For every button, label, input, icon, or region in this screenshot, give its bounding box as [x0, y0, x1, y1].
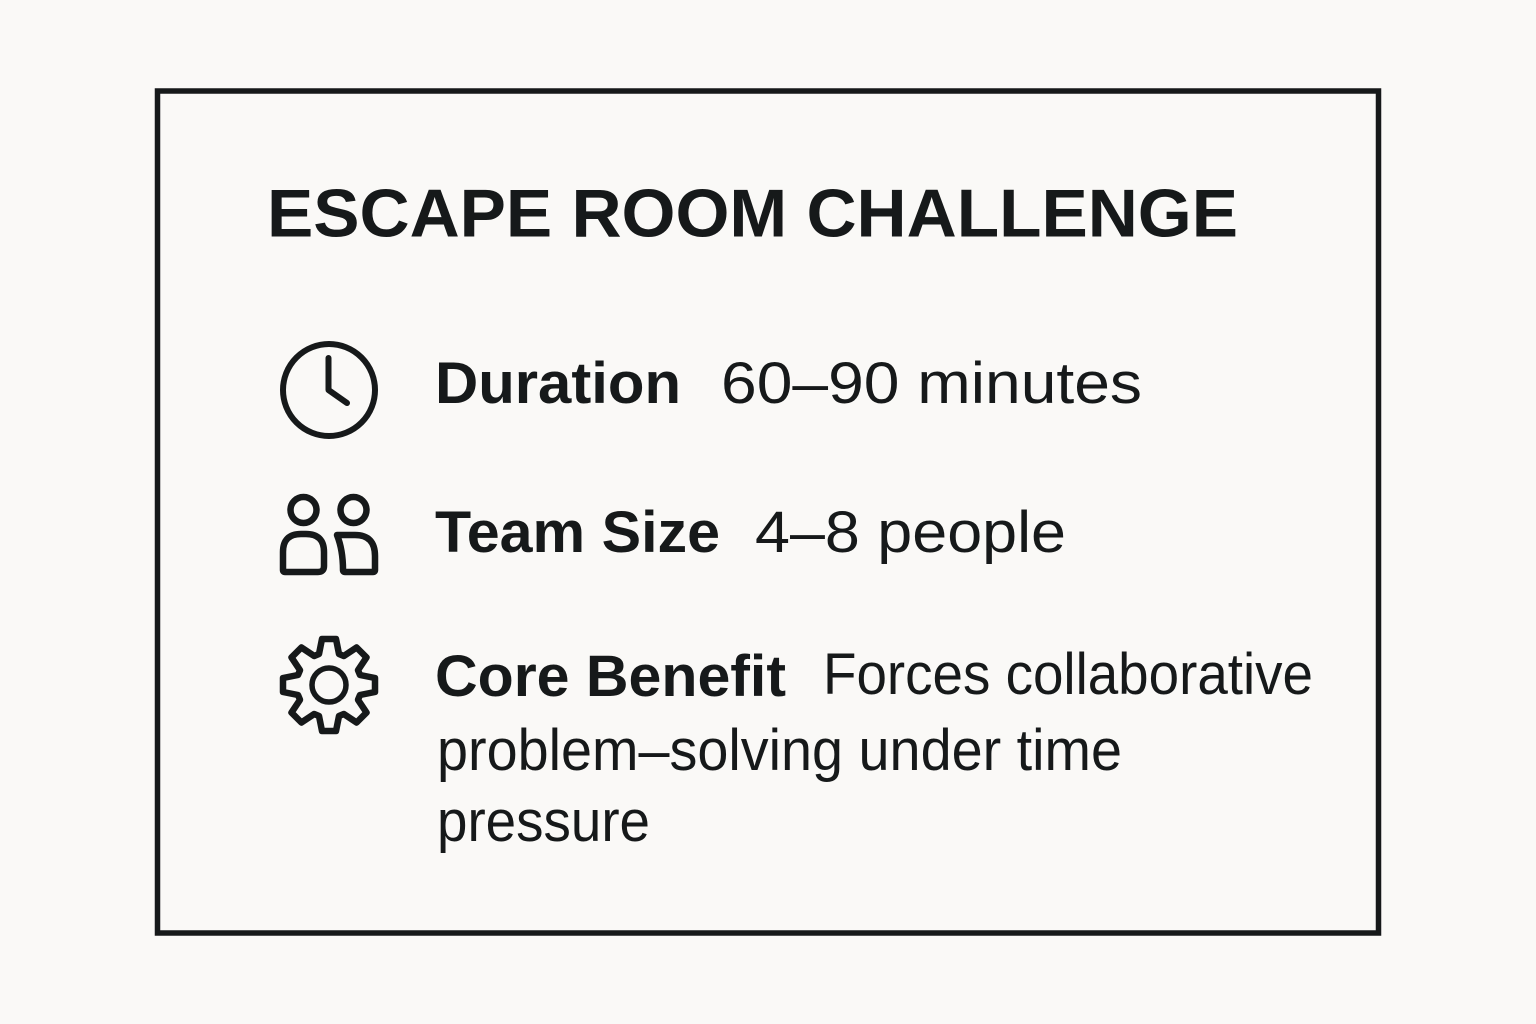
icon: two people: [283, 497, 375, 572]
icon: gear: [283, 639, 375, 731]
row: duration: Duration: [435, 351, 681, 416]
row: core benefit: pressure: [437, 789, 650, 854]
row: core benefit: problem–solving under time: [437, 718, 1122, 783]
title: ESCAPE ROOM CHALLENGE: [267, 176, 1238, 252]
row: team size: 4–8 people: [755, 500, 1066, 565]
row: core benefit: [435, 642, 1313, 854]
panel: card frame: [158, 91, 1378, 933]
row: team size: [435, 500, 1066, 565]
row: team size: Team Size: [435, 500, 720, 565]
icon: clock: [283, 344, 375, 436]
row: duration: [435, 351, 1142, 416]
row: duration: 60–90 minutes: [721, 351, 1142, 416]
row: core benefit: Forces collaborative: [823, 642, 1313, 707]
row: core benefit: Core Benefit: [435, 644, 786, 709]
